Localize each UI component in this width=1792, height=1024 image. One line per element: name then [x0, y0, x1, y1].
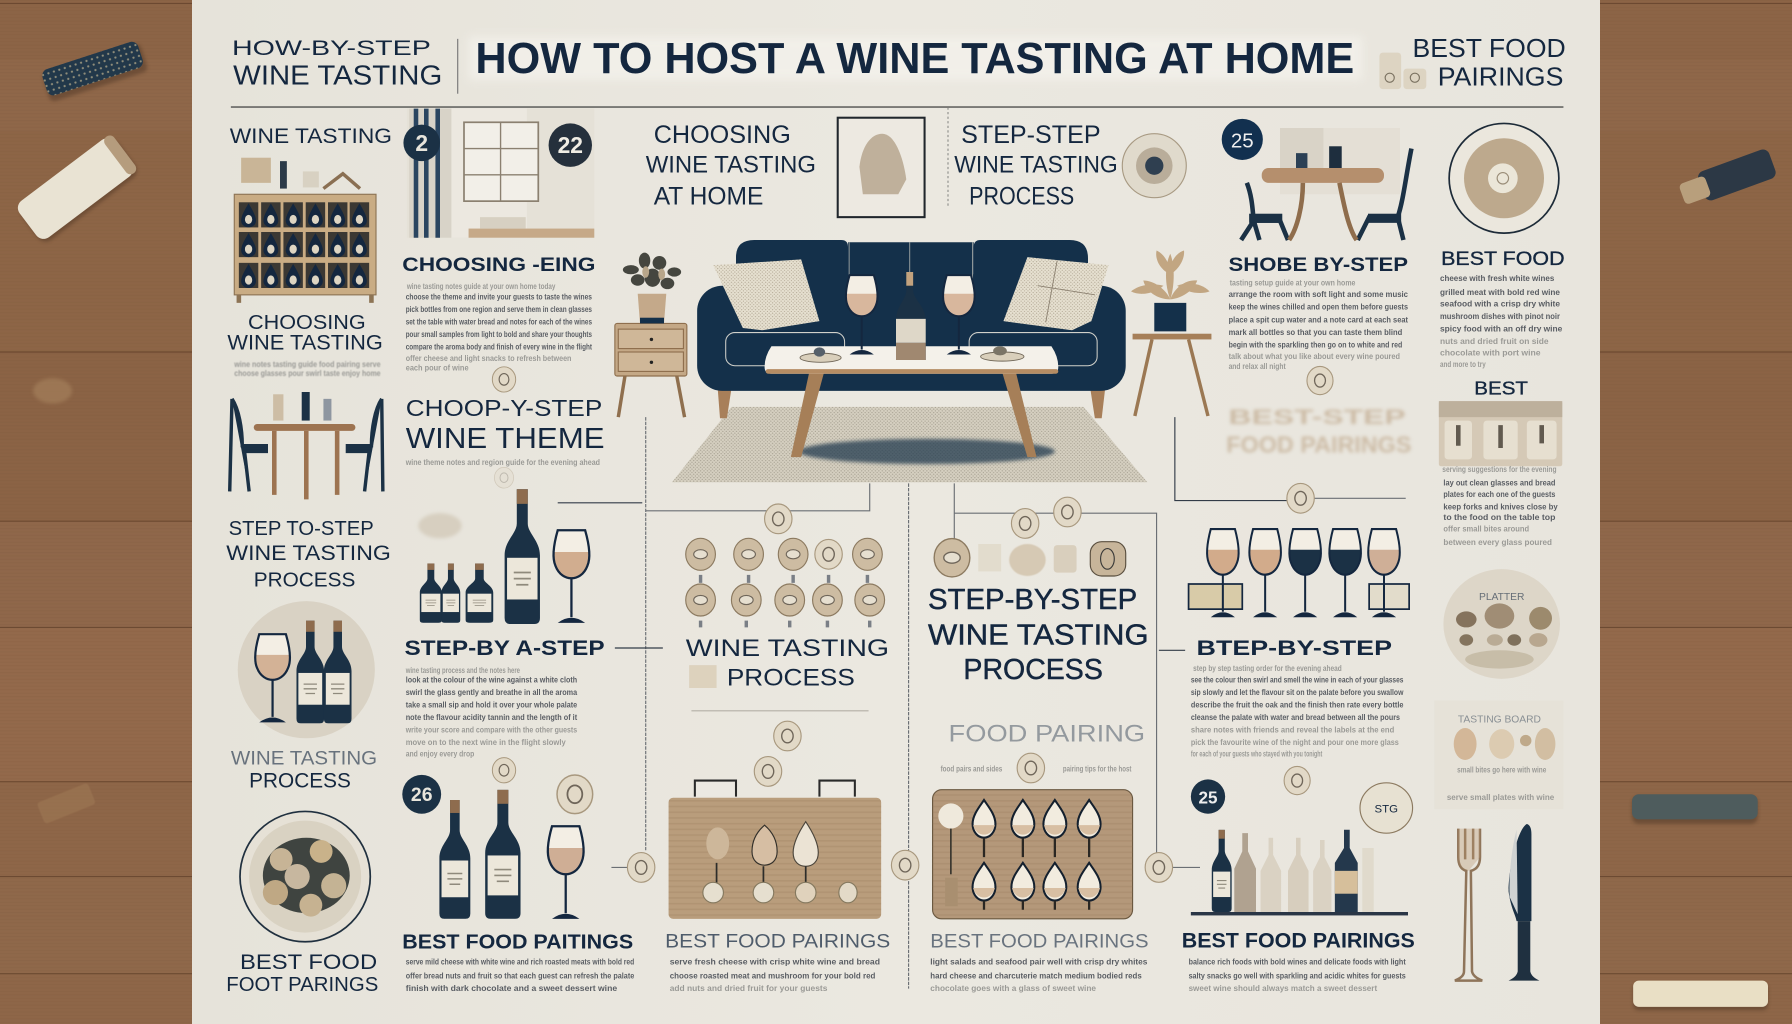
image tile: faint food: [1434, 701, 1563, 809]
text block: [406, 957, 634, 993]
heading: best food paitings: BEST FOOD PAITINGS: [402, 931, 633, 954]
icon: medallion: [1284, 766, 1310, 795]
text block: write your score and compare with the other guests: [405, 725, 577, 735]
icon: wine cabinet: [234, 194, 376, 303]
rug: [672, 407, 1147, 482]
text block: wine tasting notes guide at your own home today: [406, 281, 556, 291]
header left text: HOW-BY-STEP: [232, 35, 431, 60]
text block: serve fresh cheese with crisp white wine and bread: [670, 957, 880, 967]
header left text: [232, 35, 442, 91]
text block: keep the wines chilled and open them before guests: [1229, 302, 1408, 312]
heading: best food pairings: BEST FOOD PAIRINGS: [1182, 927, 1415, 952]
heading: faint food pairing: FOOD PAIRING: [949, 721, 1145, 748]
heading: wine tasting: WINE TASTING: [230, 123, 392, 148]
board two with glasses: [933, 790, 1133, 919]
text block: arrange the room with soft light and some music: [1229, 289, 1408, 299]
panel: center heading left: AT HOME: [654, 183, 763, 211]
heading: choop-y-step wine theme: WINE THEME: [406, 423, 605, 455]
heading: wine tasting process: [686, 635, 889, 692]
text block: take a small sip and hold it over your whole palate: [406, 699, 577, 709]
text block: to the food on the table top: [1443, 512, 1555, 522]
icon: bottles and glass: [418, 489, 589, 624]
icon: glass and bottles in circle: [238, 601, 375, 738]
text block: describe the fruit the oak and the finish then rate every bottle: [1191, 699, 1404, 709]
number badge 22: 22: [558, 132, 583, 158]
text block blurred: choose glasses pour swirl taste enjoy home: [234, 368, 381, 378]
cork: white left: [14, 133, 141, 245]
heading: step-by-step wine tasting process: [928, 584, 1149, 686]
icon: row of bottles on shelf: [1191, 830, 1408, 915]
icon: plate of cork food: [240, 811, 370, 942]
heading: shobe by-step: SHOBE BY-STEP: [1229, 254, 1408, 276]
icon: knife: [1509, 824, 1539, 981]
header right text: [1413, 33, 1566, 92]
text block: mark all bottles so that you can taste them blind: [1229, 327, 1402, 337]
number badge 25: [1222, 119, 1263, 160]
plant right: [1130, 248, 1210, 331]
text block: pick bottles from one region and serve them in clean glasses: [406, 304, 592, 314]
icon: medallion: [1307, 366, 1333, 395]
panel: center heading right: WINE TASTING: [954, 152, 1118, 179]
icon: plate: [1449, 123, 1559, 233]
cork: dark top right: [1677, 148, 1778, 209]
text block: [1189, 957, 1406, 993]
text block: [1440, 273, 1563, 369]
text block: light salads and seafood pair well with crisp dry whites: [930, 957, 1148, 967]
icon: dining table scene: [1222, 119, 1411, 240]
number badge 25: [1191, 779, 1225, 814]
heading: best food pairings left: FOOT PARINGS: [226, 973, 378, 996]
icon: room with window: [403, 109, 594, 238]
dotted divider: [947, 107, 949, 208]
text block: and more to try: [1440, 359, 1486, 369]
heading: wine tasting process: [231, 748, 377, 792]
wine glass left: [846, 275, 878, 354]
text block: [406, 281, 592, 372]
header left text: WINE TASTING: [233, 60, 442, 91]
number badge 25: 25: [1231, 129, 1254, 152]
cork: faint lower left: [37, 783, 96, 824]
icon: framed picture: [838, 118, 925, 217]
panel: third column: [1182, 119, 1415, 993]
heading: wine tasting process: PROCESS: [727, 665, 855, 692]
heading: step to-step wine tasting process: STEP TO-STEP: [229, 517, 374, 540]
panel: fourth column: [1434, 123, 1565, 981]
title: HOW TO HOST A WINE TASTING AT HOME: [475, 35, 1354, 83]
icon: food jars: [1379, 53, 1426, 89]
panel: center heading left: WINE TASTING: [646, 152, 816, 179]
text block: [930, 957, 1148, 993]
image tile: faint food: serve small plates with wine: [1447, 792, 1554, 802]
heading: choop-y-step wine theme: [406, 395, 605, 455]
heading: step to-step wine tasting process: PROCESS: [254, 568, 355, 591]
text block: spicy food with an off dry wine: [1440, 323, 1563, 333]
icon: faint medallion: [494, 467, 514, 488]
board handles: [695, 781, 855, 797]
text block: sweet wine should always match a sweet dessert: [1189, 983, 1377, 993]
image tile: faint food: TASTING BOARD: [1458, 714, 1541, 725]
title glow: [469, 37, 1362, 80]
icon: two bottles and glass: [439, 790, 584, 919]
text block: add nuts and dried fruit for your guests: [670, 983, 828, 993]
text block: place a spit cup water and a note card at each seat: [1229, 314, 1408, 324]
icon: row of wine glasses: [1189, 529, 1409, 617]
heading: wine tasting process: WINE TASTING: [686, 635, 889, 662]
text block: look at the colour of the wine against a white cloth: [406, 674, 577, 684]
text block blurred: wine notes tasting guide food pairing serve: [233, 359, 381, 369]
text block: talk about what you like about every wine poured: [1229, 351, 1400, 361]
text block: choose roasted meat and mushroom for your bold red: [670, 970, 875, 980]
number badge 2: [403, 125, 440, 161]
paper panel: [192, 0, 1600, 1024]
text block: set the table with water bread and notes for each of the wines: [406, 317, 592, 327]
heading: choop-y-step wine theme: CHOOP-Y-STEP: [406, 395, 602, 421]
text block: [1191, 663, 1404, 759]
image tile: tableware: [1439, 401, 1562, 466]
text block: sip slowly and let the flavour sit on the palate before you swallow: [1191, 687, 1404, 697]
cushion right: [1003, 257, 1109, 330]
plant left: [623, 253, 681, 323]
text block: and enjoy every drop: [406, 749, 474, 759]
panel: center heading left: [646, 121, 816, 211]
text block: note the flavour acidity tannin and the length of it: [406, 712, 577, 722]
text block: tasting setup guide at your own home: [1230, 278, 1356, 288]
side table right: [1133, 334, 1211, 416]
header right text: BEST FOOD: [1413, 33, 1566, 63]
icon: round price seal: STG: [1375, 804, 1398, 816]
heading: best: BEST: [1474, 377, 1528, 398]
heading: step-by-step wine tasting process: STEP-BY-STEP: [928, 584, 1137, 616]
text block: plates for each one of the guests: [1443, 489, 1556, 499]
panel: center heading right: PROCESS: [969, 183, 1074, 211]
faint caption row: food pairs and sides: [941, 763, 1002, 773]
cork: cream bottom right: [1633, 981, 1768, 1010]
icon: medallions: [754, 721, 801, 786]
text block: cleanse the palate with water and bread between all the pours: [1191, 712, 1400, 722]
text block: between every glass poured: [1443, 537, 1552, 547]
cork: grey right: [1632, 794, 1758, 824]
text block: offer bread nuts and fruit so that each guest can refresh the palate: [406, 970, 634, 980]
text block: [1229, 278, 1408, 371]
panel: left column: [226, 123, 392, 996]
icon: medallion: [492, 367, 516, 392]
cork: faint left: [33, 378, 72, 403]
text block: step by step tasting order for the evening ahead: [1193, 663, 1342, 673]
text block: share notes with friends and reveal the labels at the end: [1191, 725, 1394, 735]
text block: nuts and dried fruit on side: [1440, 336, 1549, 346]
icon: food platter: PLATTER: [1479, 592, 1524, 603]
plate left: [800, 347, 841, 362]
text block: [405, 665, 577, 759]
faint rule text: wine theme notes and region guide for the evening ahead: [405, 457, 600, 467]
number badge 26: [402, 775, 441, 814]
nightstand: [615, 323, 687, 417]
text block: [1442, 464, 1558, 547]
heading: choosing: CHOOSING -EING: [402, 254, 595, 276]
number badge 25: 25: [1198, 787, 1218, 807]
text block: chocolate with port wine: [1440, 347, 1541, 357]
text block: swirl the glass gently and breathe in all the aroma: [406, 687, 577, 697]
text block: wine tasting process and the notes here: [405, 665, 520, 675]
heading: wine tasting process: PROCESS: [249, 767, 351, 792]
heading: blurred best food pairings: [1226, 404, 1411, 458]
icon: food platter: [1443, 569, 1560, 679]
icon grid: tasting steps: [686, 538, 885, 627]
text block: each pour of wine: [406, 362, 469, 372]
coffee table: [765, 346, 1058, 457]
text block: finish with dark chocolate and a sweet dessert wine: [406, 983, 617, 993]
icon: round seal: [557, 775, 593, 814]
heading: step-by-step wine tasting process: PROCESS: [963, 654, 1103, 686]
cork: dark top left: [41, 39, 149, 103]
connector lines: [558, 417, 1406, 989]
text block: mushroom dishes with pinot noir: [1440, 311, 1561, 321]
panel: center heading right: STEP-STEP: [961, 121, 1101, 149]
text block: lay out clean glasses and bread: [1443, 478, 1555, 488]
text block: move on to the next wine in the flight slowly: [406, 737, 566, 747]
panel: center heading left: CHOOSING: [654, 121, 791, 149]
heading: step to-step wine tasting process: [226, 517, 391, 591]
wine glass right: [943, 275, 975, 354]
image tile: faint food: small bites go here with wine: [1457, 765, 1546, 775]
text block: [670, 957, 880, 993]
heading: best food pairings left: [226, 949, 378, 996]
text block: seafood with a crisp dry white: [1440, 298, 1560, 308]
heading: best food pairings: BEST FOOD PAIRINGS: [930, 930, 1149, 952]
text block: compare the aroma body and finish of every wine in the flight: [406, 342, 592, 352]
plate right: [981, 346, 1024, 361]
text block: and relax all night: [1229, 361, 1286, 371]
heading: btep-by-step: BTEP-BY-STEP: [1197, 635, 1392, 660]
icon: dining table with chairs: [230, 392, 383, 499]
connector medallions: [627, 483, 1314, 882]
number badge 2: 2: [415, 130, 428, 156]
board one with glasses: [669, 781, 881, 919]
text block: choose the theme and invite your guests to taste the wines: [406, 291, 592, 301]
panel: center heading right: [954, 121, 1118, 211]
heading: wine tasting process: WINE TASTING: [231, 748, 377, 770]
heading: choosing wine tasting: CHOOSING: [248, 311, 366, 334]
heading: best food pairings: BEST FOOD PAIRINGS: [665, 930, 890, 952]
icon: round price seal: [1360, 783, 1413, 833]
header right text: PAIRINGS: [1438, 62, 1563, 92]
text block: hard cheese and charcuterie match medium bodied reds: [930, 970, 1142, 980]
icon: medallion: [492, 758, 516, 783]
heading: best food: BEST FOOD: [1441, 248, 1565, 270]
text block: balance rich foods with bold wines and delicate foods with light: [1189, 957, 1406, 967]
icon row: tasting tools: [934, 539, 1126, 577]
text block: grilled meat with bold red wine: [1440, 287, 1560, 297]
text block: chocolate goes with a glass of sweet wine: [930, 983, 1096, 993]
text block: salty snacks go well with sparkling and acidic whites for guests: [1189, 970, 1406, 980]
heading: best food pairings left: BEST FOOD: [240, 949, 377, 974]
header divider: [457, 39, 458, 94]
icon: fork: [1455, 829, 1482, 981]
heading: step to-step wine tasting process: WINE TASTING: [226, 540, 391, 565]
text block: cheese with fresh white wines: [1440, 273, 1555, 283]
heading: choosing wine tasting: WINE TASTING: [227, 330, 383, 355]
text block: pour small samples from light to bold and share your thoughts: [406, 329, 592, 339]
text block: offer cheese and light snacks to refresh between: [406, 353, 571, 363]
number badge 26: 26: [411, 784, 433, 806]
heading: blurred best food pairings: BEST-STEP: [1229, 404, 1406, 429]
faint caption row: [941, 753, 1132, 783]
heading: step-by a-step: STEP-BY A-STEP: [405, 635, 605, 660]
icon: shelf objects: [241, 158, 360, 189]
heading: step-by-step wine tasting process: WINE TASTING: [928, 620, 1149, 652]
text block: serving suggestions for the evening: [1442, 464, 1557, 474]
icon: seal: [1122, 134, 1186, 198]
header rule: [231, 106, 1563, 108]
cushion left: [713, 259, 819, 330]
text block blurred: [233, 359, 381, 378]
wine bottle: [896, 272, 926, 360]
heading: blurred best food pairings: FOOD PAIRINGS: [1226, 432, 1411, 458]
faint caption row: pairing tips for the host: [1063, 763, 1132, 773]
text block: begin with the sparkling then go on to white and red: [1229, 339, 1402, 349]
text block: pick the favourite wine of the night and pour one more glass: [1191, 737, 1399, 747]
text block: see the colour then swirl and smell the wine in each of your glasses: [1191, 674, 1404, 684]
illustration: living room: [615, 240, 1211, 482]
text block: keep forks and knives close by: [1443, 502, 1558, 512]
sofa: [697, 240, 1126, 418]
heading: choosing wine tasting: [227, 311, 383, 355]
text block: serve mild cheese with white wine and rich roasted meats with bold red: [406, 957, 634, 967]
text block: offer small bites around: [1443, 523, 1529, 533]
text block: for each of your guests who stayed with you tonight: [1191, 749, 1322, 759]
number badge 22: [549, 123, 592, 167]
panel: second column: [402, 109, 634, 993]
